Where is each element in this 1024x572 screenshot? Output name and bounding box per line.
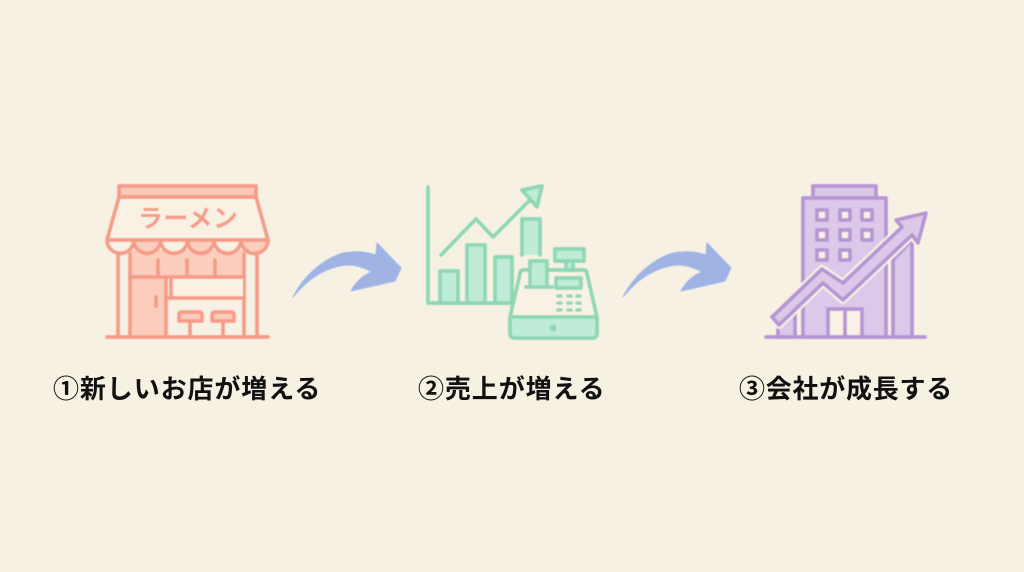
shop sign text: ラーメン xyxy=(138,205,238,233)
icon: ramen shop xyxy=(107,186,268,337)
label: step 1: ①新しいお店が増える xyxy=(53,374,321,404)
arrow: shop to sales xyxy=(293,243,401,297)
icon: sales chart and cash register xyxy=(428,186,597,338)
icon: growing company building xyxy=(766,186,926,337)
arrow: sales to company xyxy=(623,243,731,297)
label: step 2: ②売上が増える xyxy=(418,374,606,404)
label: step 3: ③会社が成長する xyxy=(739,374,953,404)
